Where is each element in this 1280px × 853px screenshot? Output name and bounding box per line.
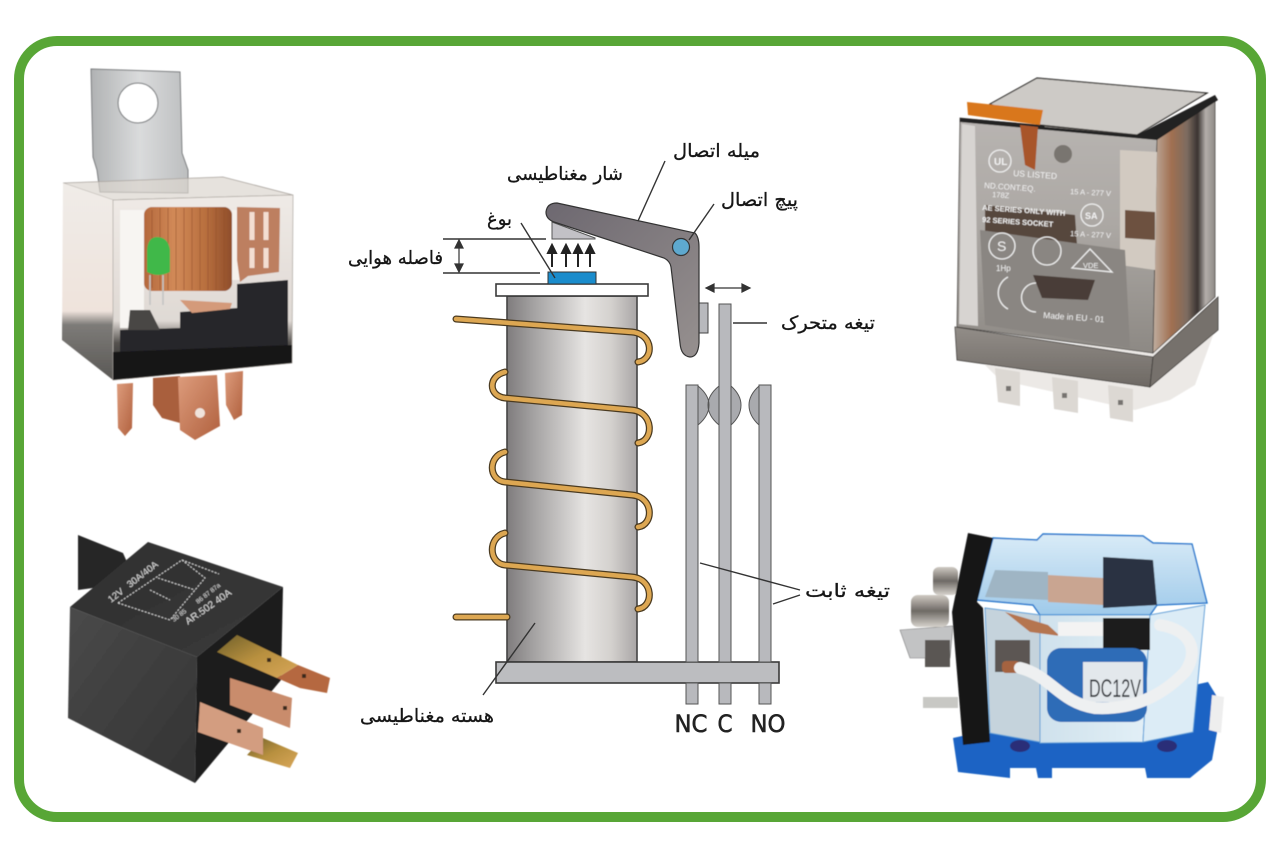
blue base bbox=[953, 682, 1222, 778]
copper contact plate bbox=[180, 300, 232, 313]
screw terminal plates bbox=[900, 626, 953, 658]
base plate bbox=[496, 662, 779, 683]
top face bbox=[990, 78, 1207, 135]
armature travel arrow bbox=[706, 284, 750, 292]
right face bbox=[1153, 98, 1215, 353]
black terminal block bbox=[120, 280, 288, 355]
contact highlights bbox=[252, 212, 266, 268]
coil winding texture bbox=[152, 208, 224, 290]
white sleeve bbox=[1058, 622, 1103, 636]
left face bbox=[62, 183, 113, 380]
top face printed ratings: 30A/40A bbox=[125, 559, 161, 590]
leader: magnetic core bbox=[483, 623, 535, 695]
contact bumps bbox=[698, 386, 759, 425]
air gap reference lines bbox=[443, 239, 546, 273]
LED legs bbox=[150, 275, 163, 305]
UL mark: UL bbox=[994, 157, 1007, 168]
clear left strip bbox=[959, 124, 978, 326]
label: air gap: فاصله هوایی bbox=[348, 248, 443, 269]
magnetic flux arrows bbox=[548, 245, 594, 267]
label: connecting rod: میله اتصال bbox=[673, 141, 760, 162]
armature pad bbox=[552, 222, 595, 239]
origin: Made in EU - 01 bbox=[1043, 310, 1105, 324]
rating: 15 A - 277 V bbox=[1070, 187, 1111, 198]
printed approval labels bbox=[982, 157, 1111, 324]
copper coil bbox=[144, 207, 232, 291]
top face printed ratings: 12V bbox=[106, 586, 127, 605]
copper pin bbox=[117, 383, 133, 436]
left inner terminals bbox=[995, 640, 1030, 672]
label: connecting screw: پیچ اتصال bbox=[721, 190, 798, 211]
leaders: fixed blades bbox=[700, 563, 800, 604]
US listed: US LISTED bbox=[1013, 168, 1057, 181]
CSA mark: SA bbox=[1085, 211, 1098, 221]
green LED bbox=[147, 237, 170, 275]
copper pin bbox=[178, 375, 220, 440]
copper contacts bbox=[237, 207, 280, 282]
series note: AE SERIES ONLY WITH bbox=[982, 203, 1066, 218]
gold bottom blade bbox=[247, 738, 298, 768]
leader: moving blade bbox=[733, 322, 767, 324]
C blade bbox=[719, 304, 731, 704]
terminal face bbox=[195, 587, 283, 783]
arrow 1 bbox=[548, 245, 556, 267]
copper mid blade bbox=[230, 678, 292, 728]
front face bbox=[113, 195, 293, 380]
black end plate bbox=[952, 533, 993, 745]
small dark parts by LED bbox=[128, 310, 160, 330]
rear mounting tab bbox=[78, 535, 127, 590]
front face bbox=[68, 607, 197, 783]
orange lever stem bbox=[1020, 125, 1038, 170]
inner grey plate bbox=[985, 570, 1048, 600]
leader: connecting screw bbox=[689, 204, 714, 240]
copper piece bbox=[1048, 575, 1103, 605]
C logo bbox=[998, 277, 1008, 309]
lower screw bbox=[911, 595, 949, 627]
relay top face bbox=[63, 177, 293, 200]
NC terminal label: NC bbox=[674, 710, 708, 738]
base mounting hole bbox=[1157, 740, 1177, 752]
dark opening bbox=[1033, 275, 1095, 300]
terminal numbers: 86 87 87a bbox=[195, 582, 222, 606]
copper upper blade extension bbox=[277, 665, 330, 693]
S logo bbox=[989, 233, 1015, 259]
approval logos bbox=[989, 150, 1112, 312]
socket note: 92 SERIES SOCKET bbox=[982, 215, 1054, 229]
front pin bbox=[1052, 377, 1078, 413]
equipment code: ND.CONT.EQ. bbox=[984, 181, 1036, 194]
pin hole bbox=[195, 408, 205, 418]
right base bbox=[1150, 297, 1218, 387]
C terminal label: C bbox=[717, 710, 733, 738]
white base tab bbox=[1209, 695, 1224, 733]
label: magnetic flux: شار مغناطیسی bbox=[507, 164, 623, 185]
copper strand bbox=[1005, 612, 1060, 636]
code: 178Z bbox=[992, 190, 1010, 200]
dashed schematic bbox=[118, 560, 219, 620]
UL logo bbox=[989, 150, 1011, 172]
arrow 3 bbox=[574, 245, 582, 267]
photo: transparent blue relay with DC12V coil bbox=[900, 533, 1224, 778]
cover top bbox=[977, 534, 1207, 615]
screw shadow bbox=[1054, 145, 1072, 163]
relay cutaway diagram bbox=[443, 203, 786, 738]
pale rear pins bbox=[975, 330, 1215, 410]
armature push tab bbox=[697, 303, 708, 333]
copper pin bbox=[153, 376, 180, 423]
photo: clear automotive relay with bracket and LED bbox=[62, 69, 293, 440]
screw shaft bbox=[925, 640, 950, 667]
dark window behind labels bbox=[985, 205, 1077, 245]
leader: pole piece bbox=[521, 223, 555, 278]
brown coil part bbox=[1125, 210, 1155, 240]
copper terminal bbox=[1002, 661, 1020, 673]
NC blade bbox=[686, 385, 698, 704]
VDE: VDE bbox=[1083, 261, 1098, 270]
photo: power relay with transparent grey case bbox=[955, 78, 1218, 422]
upper screw bbox=[933, 567, 958, 595]
arrow 4 bbox=[586, 245, 594, 267]
label: pole piece: بوغ bbox=[487, 209, 512, 230]
label: magnetic core: هسته مغناطیسی bbox=[360, 706, 494, 727]
blade holes bbox=[237, 658, 306, 733]
black base band bbox=[113, 345, 292, 380]
cover front bbox=[1040, 615, 1150, 743]
coil label bbox=[1083, 662, 1143, 702]
Y logo bbox=[1033, 237, 1061, 265]
metal bracket bbox=[91, 69, 188, 193]
CSA logo bbox=[1081, 204, 1103, 226]
dark top edge bbox=[960, 95, 1218, 140]
grey lower panel bbox=[980, 230, 1130, 348]
rating: 15 A - 277 V bbox=[1070, 229, 1111, 240]
pivot pin bbox=[672, 238, 690, 256]
VDE triangle bbox=[1072, 249, 1112, 272]
front face bbox=[957, 118, 1157, 353]
gold upper blade bbox=[217, 635, 298, 678]
white bobbin bbox=[120, 210, 144, 328]
CE logo bbox=[1021, 283, 1036, 312]
blue pole piece bbox=[548, 272, 596, 284]
black micro switch bbox=[1103, 557, 1157, 608]
black switch lower bbox=[1103, 618, 1150, 650]
leader: connecting rod bbox=[638, 161, 665, 221]
copper lower blade bbox=[198, 702, 263, 755]
label: moving blade: تیغه متحرک bbox=[781, 313, 875, 334]
white braided wire bbox=[1020, 625, 1192, 708]
top plate bbox=[496, 284, 648, 296]
front pin bbox=[1108, 385, 1133, 422]
photo: black automotive relay with blades bbox=[68, 535, 330, 783]
magnetic core cylinder bbox=[507, 296, 637, 662]
coil winding outline bbox=[456, 319, 649, 617]
white coil part bbox=[1120, 150, 1157, 270]
top face printed model: AR.502 40A bbox=[183, 587, 234, 627]
NO blade bbox=[759, 385, 771, 704]
coil winding copper bbox=[456, 319, 649, 617]
side blade terminal bbox=[923, 697, 958, 708]
S mark: S bbox=[997, 238, 1006, 254]
base mounting hole bbox=[1010, 740, 1030, 752]
pin holes bbox=[1006, 386, 1123, 405]
air gap double arrow bbox=[455, 240, 463, 272]
cover right side bbox=[1143, 605, 1205, 742]
cover left side bbox=[985, 608, 1040, 742]
coil voltage label: DC12V bbox=[1089, 675, 1141, 703]
terminal numbers: 30 85 bbox=[171, 608, 188, 624]
front pin bbox=[995, 368, 1020, 406]
blue coil body bbox=[1047, 648, 1147, 722]
top face bbox=[70, 542, 283, 657]
orange test lever bbox=[967, 102, 1043, 125]
arrow 2 bbox=[562, 245, 570, 267]
horsepower: 1Hp bbox=[996, 264, 1011, 273]
front base bbox=[955, 327, 1153, 387]
white strip bbox=[232, 210, 240, 280]
copper pin bbox=[225, 371, 243, 420]
label: fixed blade: تیغه ثابت bbox=[805, 581, 890, 602]
NO terminal label: NO bbox=[750, 710, 786, 738]
armature lever bbox=[546, 203, 699, 357]
